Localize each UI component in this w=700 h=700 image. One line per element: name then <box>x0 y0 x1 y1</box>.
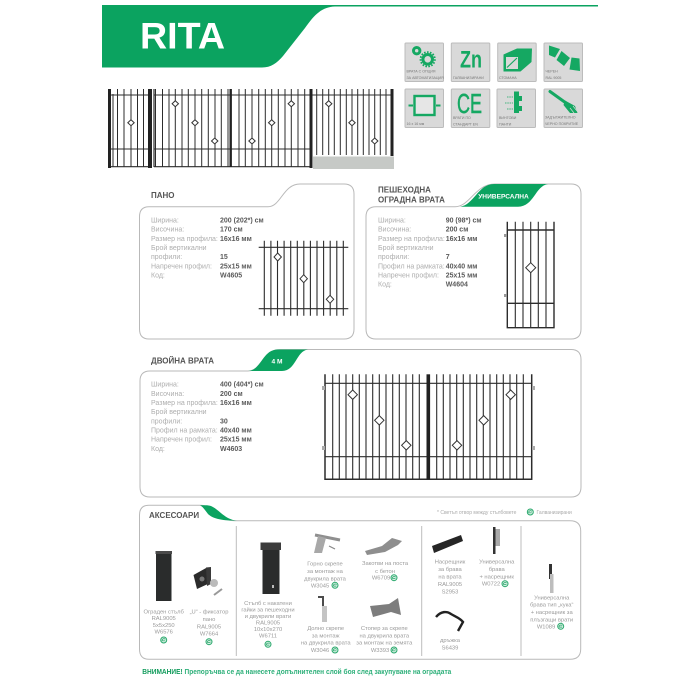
spec table: врата: 25x15 мм <box>446 272 477 280</box>
spec table: двойна врата: W4603 <box>220 446 242 453</box>
spec table: двойна врата: 40x40 мм <box>220 428 252 434</box>
icon tile: screw hinges: ПАНТИ <box>499 122 512 126</box>
panel: ПАНО <box>140 184 354 339</box>
icon tile: black RAL 9005: ЧЕРЕН <box>546 70 558 74</box>
legend note: Галванизирани <box>536 510 572 516</box>
accessory: закотви на поста: с бетон <box>375 569 395 575</box>
spec table: двойна врата: 16x16 мм <box>220 400 252 407</box>
fence overview illustration <box>108 89 394 169</box>
spec table: врата: Профил на рамката: <box>378 263 445 270</box>
accessory: насрещник за брава: за брава <box>438 567 463 573</box>
spec table: двойна врата: 200 см <box>220 391 243 398</box>
accessory: брава тип кука: плъзгащи врати <box>530 617 573 623</box>
accessory: стопер за скрепе: Стопер за скрепе <box>361 626 408 632</box>
spec table: двойна врата: Височина: <box>151 391 184 398</box>
icon tile: CE standard: СТАНДАРТ EN <box>453 122 478 126</box>
accessory: универсална брава: W0722 <box>482 582 500 588</box>
accessory: стопер за скрепе: за монтаж на земята <box>356 641 413 647</box>
accessory: фиксатор пано: „U“ - фиксатор <box>190 610 228 616</box>
spec table: ПАНО <box>151 218 264 280</box>
icon tile: black RAL 9005 <box>544 43 582 82</box>
accessory: горно скрепе: Горно скрепе <box>307 561 343 567</box>
spec table: врата: 40x40 мм <box>446 263 477 270</box>
heading: аксесоари: АКСЕСОАРИ <box>149 511 199 520</box>
spec table: врата <box>378 218 482 289</box>
accessory: стълб с накатени гайки: 10x10x270 <box>254 627 282 633</box>
accessory: стопер за скрепе <box>356 598 413 654</box>
accessory: стопер за скрепе: W3393 <box>371 648 389 654</box>
icon tile: paint brush <box>544 89 582 128</box>
accessory: ограден стълб: 5x5x250 <box>153 623 175 629</box>
green swoosh <box>200 505 237 521</box>
heading: двойна врата: ДВОЙНА ВРАТА <box>151 356 214 365</box>
accessory: брава тип кука: брава тип „кука“ <box>530 603 574 609</box>
icon tile: automation gears: ВРАТА С ОПЦИЯ <box>406 70 436 74</box>
spec table: врата: Напречен профил: <box>378 272 439 280</box>
accessory: брава тип кука: + насрещник за <box>531 610 573 616</box>
heading: пешеходна оградна врата: ПЕШЕХОДНА <box>378 186 431 195</box>
accessory: горно скрепе <box>304 535 347 589</box>
accessory: дръжка <box>436 612 463 651</box>
accessory: закотви на поста <box>362 538 409 582</box>
icon tile: automation gears: ЗА АВТОМАТИЗАЦИЯ <box>406 76 444 80</box>
accessory: брава тип кука: Универсална <box>534 595 570 601</box>
accessory: долно скрепе: за монтаж <box>312 634 340 640</box>
accessory: брава тип кука: W1089 <box>537 624 555 630</box>
accessory: стълб с накатени гайки: RAL9005 <box>256 621 280 627</box>
icon tile: profile 16 x 16 <box>405 89 444 128</box>
accessory: дръжка: дръжка <box>440 638 461 644</box>
spec table: двойна врата: Размер на профила: <box>151 400 218 407</box>
accessory: долно скрепе: Долно скрепе <box>307 626 344 632</box>
accessory: насрещник за брава: на врата <box>438 575 462 581</box>
warning note: ВНИМАНИЕ! Препоръчва се да нанесете допълнителен слой боя след закупуване на оградата <box>142 668 451 676</box>
accessory: ограден стълб: Ограден стълб <box>144 610 185 616</box>
spec table: двойна врата: Брой вертикални <box>151 408 207 416</box>
badge: универсална: УНИВЕРСАЛНА <box>478 194 529 200</box>
accessory: закотви на поста: Закотви на поста <box>362 561 409 567</box>
badge: 4 м: 4 М <box>272 358 283 366</box>
spec table: ПАНО: 25x15 мм <box>220 263 252 270</box>
accessory: универсална брава: Универсална <box>479 560 515 566</box>
spec table: врата: W4604 <box>446 282 468 289</box>
accessory: стълб с накатени гайки: и двукрили врати <box>245 614 291 620</box>
icon tile: CE standard: CE <box>457 88 482 119</box>
spec table: ПАНО: Напречен профил: <box>151 263 212 270</box>
icon tile: screw hinges: ВИНТОВИ <box>499 116 517 120</box>
heading: пешеходна оградна врата: ОГРАДНА ВРАТА <box>378 196 445 205</box>
accessory: фиксатор пано: W7664 <box>200 632 219 638</box>
accessory: горно скрепе: двукрила врата <box>304 576 347 582</box>
spec table: врата: 7 <box>446 254 450 261</box>
spec table: врата: 90 (98*) см <box>446 218 482 224</box>
accessory: долно скрепе: W3046 <box>311 648 329 654</box>
spec table: ПАНО: профили: <box>151 254 182 261</box>
icon tile: screw hinges <box>497 89 536 128</box>
accessory: горно скрепе: W3045 <box>311 583 329 589</box>
accessory: насрещник за брава <box>432 535 466 595</box>
accessory: универсална брава: + насрещник <box>479 575 514 581</box>
spec table: ПАНО: 16x16 мм <box>220 236 252 243</box>
header banner <box>102 5 598 68</box>
accessory: брава тип кука <box>530 564 574 630</box>
accessory: универсална брава: брава <box>489 567 505 573</box>
icon tile: steel tube: СТОМАНА <box>499 76 517 80</box>
icon tile: profile 16 x 16: 16 x 16 мм <box>406 122 425 126</box>
icon tile: paint brush: ЧЕРНО ПОКРИТИЕ <box>545 122 579 126</box>
accessory: универсална брава <box>479 527 515 588</box>
spec table: врата: Височина: <box>378 227 411 234</box>
accessory: долно скрепе: на двукрила врата <box>301 641 351 647</box>
spec table: ПАНО: 170 см <box>220 227 243 234</box>
legend note <box>437 509 572 516</box>
accessory: стопер за скрепе: на двукрила врата <box>359 634 410 640</box>
accessory: стълб с накатени гайки: гайки за пешеходни <box>241 606 295 613</box>
fence panel drawing <box>259 241 348 316</box>
spec table: ПАНО: 200 (202*) см <box>220 218 264 224</box>
double gate drawing <box>322 374 535 479</box>
title: RITA <box>140 15 225 56</box>
panel: двойна врата <box>140 350 581 497</box>
accessory: стълб с накатени гайки: Стълб с накатени <box>244 601 292 607</box>
icon tile: galvanized: Zn <box>460 46 482 73</box>
spec table: врата: Размер на профила: <box>378 236 445 243</box>
heading: пешеходна оградна врата <box>378 186 445 205</box>
icon tile: steel tube <box>498 43 536 82</box>
spec table: двойна врата: Ширина: <box>151 382 179 389</box>
accessory: ограден стълб: W6576 <box>155 630 173 636</box>
accessory: фиксатор пано: пано <box>203 617 215 623</box>
spec table: врата: 200 см <box>446 227 468 234</box>
accessory: насрещник за брава: RAL9005 <box>438 582 462 588</box>
accessory: насрещник за брава: Насрещник <box>435 560 466 566</box>
accessory: фиксатор пано <box>190 567 228 645</box>
accessory: насрещник за брава: S2953 <box>442 589 458 595</box>
gate drawing <box>504 222 554 328</box>
spec table: двойна врата: 25x15 мм <box>220 437 252 444</box>
spec table: ПАНО: Ширина: <box>151 218 179 224</box>
spec table: ПАНО: Код: <box>151 272 165 280</box>
spec table: врата: Код: <box>378 282 392 289</box>
accessory: горно скрепе: за монтаж на <box>307 569 344 575</box>
wall base <box>313 156 394 169</box>
accessory: ограден стълб: RAL9005 <box>152 616 176 622</box>
panel: пешеходна оградна врата <box>366 184 581 339</box>
spec table: врата: Брой вертикални <box>378 244 434 252</box>
icon tile: paint brush: ЗАДЪЛЖИТЕЛНО <box>545 116 576 120</box>
icon tile: CE standard: ВРАТИ ПО <box>453 116 471 120</box>
spec table: двойна врата: Код: <box>151 446 165 453</box>
accessory: закотви на поста: W6709 <box>372 576 390 582</box>
spec table: ПАНО: Размер на профила: <box>151 236 218 243</box>
icon tile: black RAL 9005: RAL 9005 <box>546 76 561 80</box>
icon tile: galvanized <box>451 43 490 82</box>
icon tile: CE standard <box>451 88 490 128</box>
spec table: двойна врата: профили: <box>151 418 182 425</box>
legend note: * Светъл отвор между стълбовете <box>437 510 517 516</box>
heading: ПАНО: ПАНО <box>151 191 175 200</box>
icon tile: galvanized: ГАЛВАНИЗИРАНИ <box>453 76 484 80</box>
badge: 4 м <box>248 350 308 371</box>
accessory: стълб с накатени гайки: W6711 <box>259 634 277 640</box>
accessory: ограден стълб <box>144 551 185 643</box>
accessory: долно скрепе <box>301 597 351 654</box>
spec table: двойна врата: Профил на рамката: <box>151 428 218 434</box>
panel: аксесоари <box>140 505 581 659</box>
icon tile: automation gears <box>405 43 444 82</box>
spec table: двойна врата: 400 (404*) см <box>220 382 264 389</box>
spec table: двойна врата: Напречен профил: <box>151 437 212 444</box>
accessory: фиксатор пано: RAL9005 <box>197 624 221 630</box>
accessory: стълб с накатени гайки <box>241 542 295 647</box>
badge: универсална <box>460 184 548 207</box>
spec table: ПАНО: W4605 <box>220 272 242 280</box>
spec table: врата: 16x16 мм <box>446 236 477 243</box>
spec table: ПАНО: Брой вертикални <box>151 244 207 252</box>
spec table: двойна врата <box>151 382 264 453</box>
spec table: врата: Ширина: <box>378 218 406 224</box>
spec table: ПАНО: 15 <box>220 254 228 261</box>
accessory: дръжка: S6439 <box>442 645 458 651</box>
spec table: врата: профили: <box>378 254 409 261</box>
spec table: двойна врата: 30 <box>220 418 228 425</box>
spec table: ПАНО: Височина: <box>151 227 184 234</box>
